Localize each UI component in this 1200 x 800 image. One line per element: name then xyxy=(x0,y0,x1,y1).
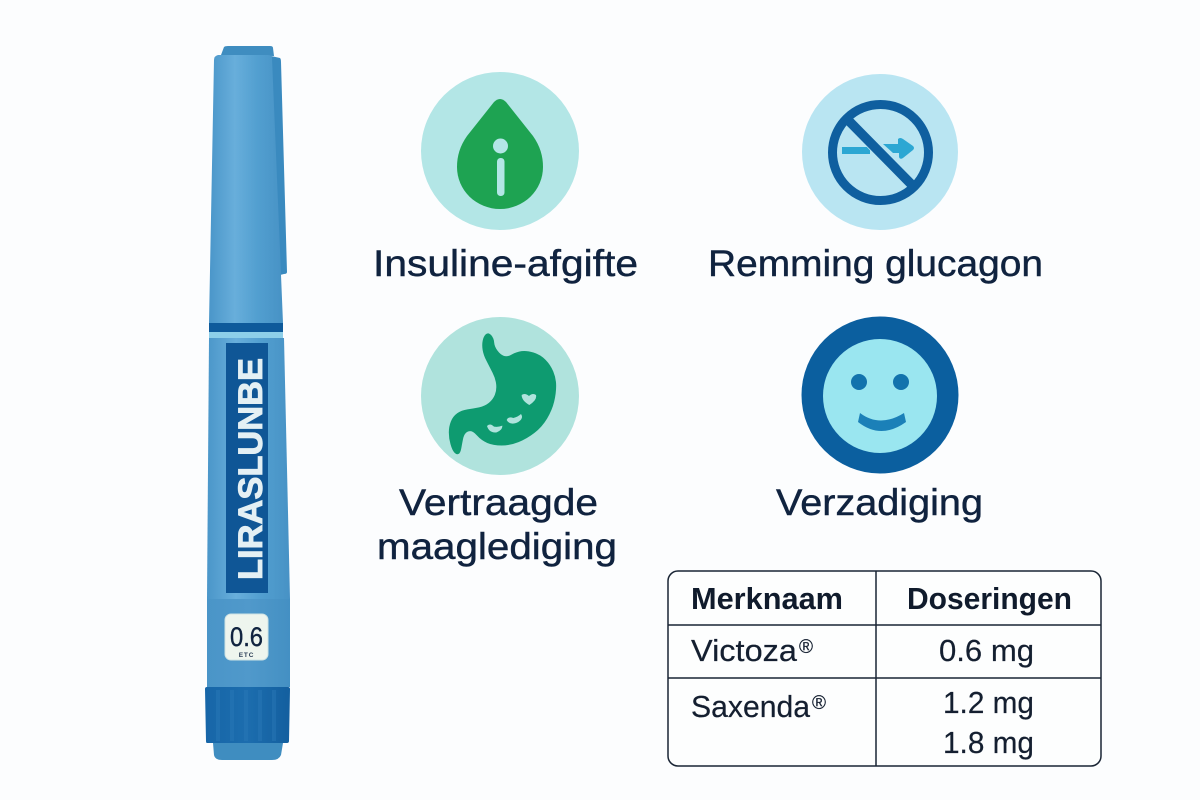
row: Saxenda: ® xyxy=(812,693,826,714)
row: Saxenda: 1.2 mg xyxy=(943,685,1034,720)
label: delayed gastric emptying: Vertraagde xyxy=(399,482,598,523)
icon: insulin drop xyxy=(421,72,579,230)
pen collar xyxy=(205,687,290,743)
row: Saxenda xyxy=(691,685,1034,760)
icon: stomach xyxy=(421,317,579,475)
pen tip xyxy=(213,743,283,760)
row: Saxenda: Saxenda xyxy=(691,689,811,724)
row: Victoza xyxy=(691,633,1034,668)
dosage table xyxy=(668,571,1101,766)
label: satiety: Verzadiging xyxy=(776,482,983,523)
label: delayed gastric emptying xyxy=(377,482,617,567)
label: delayed gastric emptying: maaglediging xyxy=(377,526,617,567)
pen cap clip xyxy=(271,56,287,275)
label: glucagon inhibition: Remming glucagon xyxy=(708,243,1043,284)
icon: smiley satiety xyxy=(802,316,958,474)
icon: glucagon inhibition xyxy=(802,74,958,230)
pen dose badge: 0.6 xyxy=(230,622,263,652)
pen dose badge xyxy=(225,614,268,660)
table header: brand: Merknaam xyxy=(691,581,843,616)
table header: doses: Doseringen xyxy=(907,581,1072,616)
pen lower section xyxy=(207,599,290,687)
row: Victoza: ® xyxy=(799,637,813,658)
pen light band xyxy=(209,332,283,338)
pen dose badge: ETC xyxy=(239,652,254,659)
pen cap top xyxy=(221,46,274,56)
pen illustration xyxy=(205,46,290,760)
row: Victoza: 0.6 mg xyxy=(939,633,1034,668)
row: Victoza: Victoza xyxy=(691,633,798,668)
pen cap body xyxy=(209,55,283,323)
pen name label: LIRASLUNBE xyxy=(232,358,270,580)
pen dark band xyxy=(209,323,283,332)
label: insulin release: Insuline-afgifte xyxy=(373,243,638,284)
row: Saxenda: 1.8 mg xyxy=(943,725,1034,760)
pen barrel xyxy=(207,338,290,599)
